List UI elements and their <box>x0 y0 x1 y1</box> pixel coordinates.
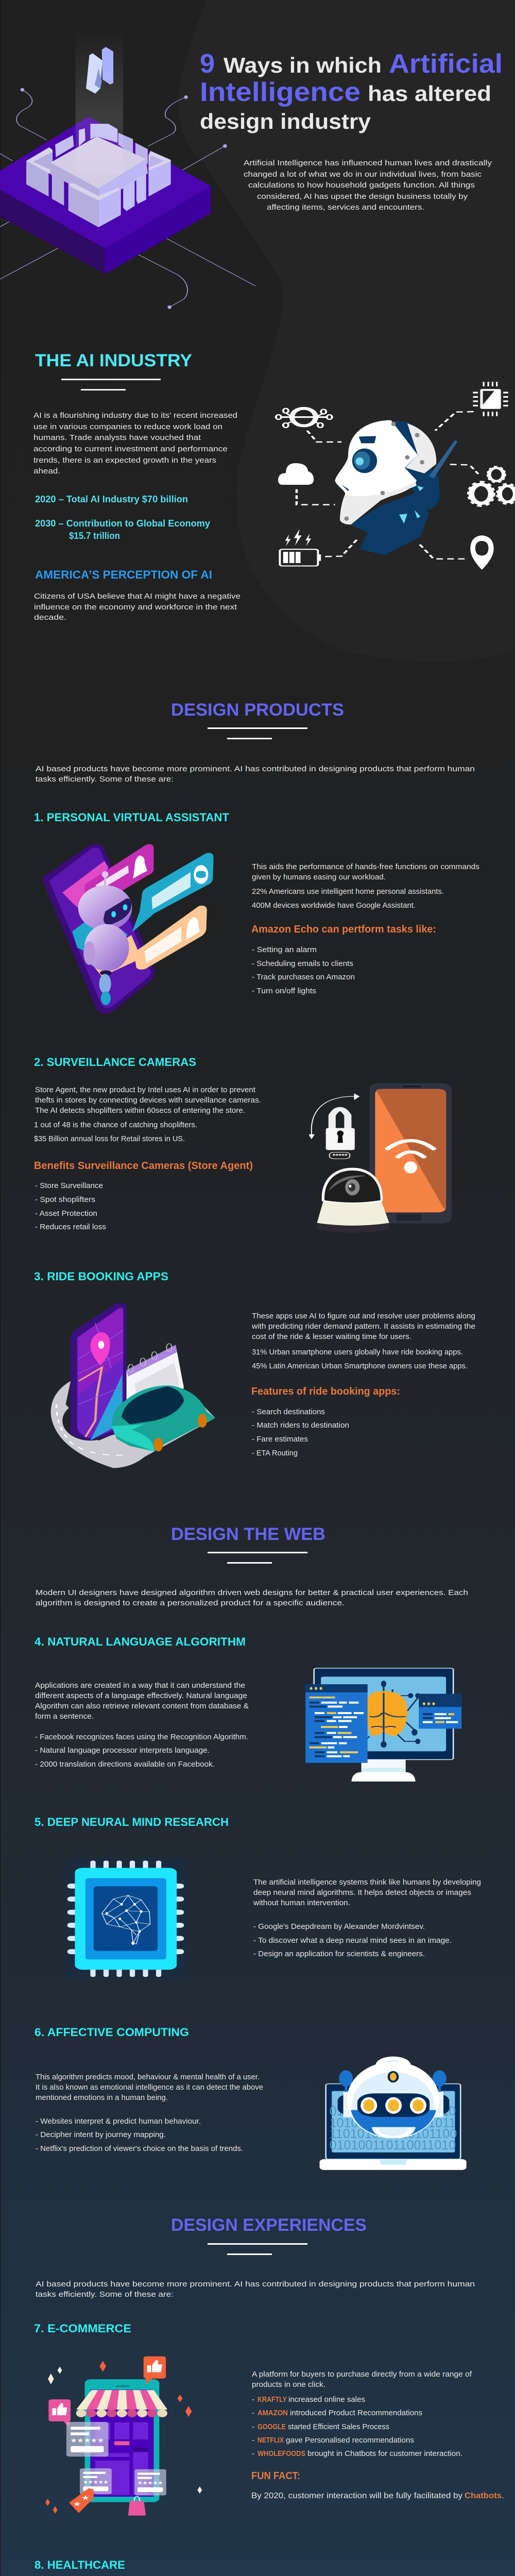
benefits list <box>35 1181 106 1231</box>
deep neural text: without human intervention. <box>253 1899 350 1907</box>
e-commerce brand list: WHOLEFOODS <box>258 2449 305 2458</box>
fun fact: e-commerce: Chatbots <box>465 2492 502 2500</box>
market statistics: $15.7 trillion <box>69 531 120 541</box>
fun fact: e-commerce: FUN FACT: <box>251 2470 300 2482</box>
America's perception paragraph <box>34 592 241 622</box>
illustration: robot in laptop <box>320 2057 467 2170</box>
benefits list: - Asset Protection <box>35 1209 97 1218</box>
icon: gears <box>469 467 515 506</box>
deep neural text: - Google's Deepdream by Alexander Mordvintsev. <box>253 1922 425 1931</box>
e-commerce brand list: - <box>252 2422 254 2431</box>
e-commerce brand list: GOOGLE <box>258 2422 286 2431</box>
natural language text: different aspects of a language effectively. Natural language <box>35 1691 247 1700</box>
illustration: monitor with brain and code panels <box>305 1668 461 1782</box>
design experiences intro: tasks efficiently. Some of these are: <box>36 2290 174 2299</box>
affective computing text: - Websites interpret & predict human behaviour. <box>36 2117 201 2126</box>
heading: design experiences <box>171 2215 367 2255</box>
heading: the AI industry: THE AI INDUSTRY <box>35 351 192 370</box>
price tag <box>69 2488 94 2513</box>
title: has altered <box>368 81 491 106</box>
like bubble: pink <box>48 2399 71 2427</box>
brain <box>362 1681 420 1748</box>
amazon echo task list: - Turn on/off lights <box>252 987 316 995</box>
surveillance text <box>34 1086 261 1143</box>
amazon echo task list: - Setting an alarm <box>252 945 317 954</box>
market statistics <box>35 494 210 541</box>
robot character <box>78 871 132 1005</box>
awning <box>76 2390 167 2417</box>
natural language text: - Natural language processor interprets language. <box>35 1746 210 1755</box>
review card: ★★★★★ <box>70 2436 104 2444</box>
intro paragraph: affecting items, services and encounters. <box>267 203 424 212</box>
amazon echo subheading: Amazon Echo can pertform tasks like: <box>251 924 436 935</box>
review card small left: ★★★★★ <box>83 2480 108 2485</box>
personal assistant text: given by humans easing our workload. <box>252 873 386 882</box>
binary digits <box>330 2104 457 2152</box>
e-commerce brand list: AMAZON <box>258 2409 288 2417</box>
heading: natural language algorithm: 4. NATURAL LANGUAGE ALGORITHM <box>35 1635 246 1648</box>
illustration: robot head with icons <box>276 382 515 570</box>
e-commerce brand list: gave Personalised recommendations <box>286 2436 414 2445</box>
e-commerce brand list: - <box>252 2409 254 2417</box>
market statistics: 2020 – Total AI Industry $70 billion <box>35 494 188 504</box>
robot head <box>335 420 457 555</box>
surveillance text: thefts in stores by connecting devices with surveillance cameras. <box>35 1096 261 1105</box>
title <box>200 49 503 133</box>
ride booking text: 45% Latin American Urban Smartphone owners use these apps. <box>252 1362 468 1370</box>
AI industry paragraph: humans. Trade analysts have vouched that <box>33 433 201 442</box>
price tag: ★ <box>73 2500 81 2507</box>
deep neural text <box>253 1878 481 1958</box>
intro paragraph <box>244 159 492 212</box>
affective computing text: This algorithm predicts mood, behaviour & mental health of a user. <box>36 2073 260 2081</box>
heading: America's perception: AMERICA’S PERCEPTION OF AI <box>35 568 212 581</box>
illustration: neural brain microchip <box>65 1857 187 1980</box>
market statistics: 2030 – Contribution to Global Economy <box>35 518 210 529</box>
surveillance text: $35 Billion annual loss for Retail stores in US. <box>34 1134 185 1143</box>
icon: circuit <box>276 409 332 428</box>
fun fact: e-commerce <box>251 2470 504 2500</box>
benefits list: - Spot shoplifters <box>35 1195 95 1204</box>
design products intro <box>36 765 475 784</box>
America's perception paragraph: decade. <box>34 613 66 622</box>
teal car <box>112 1385 215 1451</box>
personal assistant text: This aids the performance of hands-free functions on commands <box>252 862 479 871</box>
design the web intro: Modern UI designers have designed algorithm driven web designs for better & practical user experiences. Each <box>36 1588 468 1597</box>
fun fact: e-commerce: By 2020, customer interaction will be fully facilitated by <box>251 2492 462 2500</box>
ride booking text: 31% Urban smartphone users globally have ride booking apps. <box>252 1348 463 1357</box>
heading: the AI industry <box>35 351 192 391</box>
ride booking feature list: - ETA Routing <box>252 1449 298 1458</box>
design products intro: tasks efficiently. Some of these are: <box>36 775 174 784</box>
AI industry paragraph: use in various companies to reduce work load on <box>33 422 222 431</box>
icon: microchip <box>473 382 508 416</box>
phone shop <box>85 2379 159 2502</box>
ride booking feature list: - Fare estimates <box>252 1435 308 1444</box>
personal assistant text: 400M devices worldwide have Google Assistant. <box>252 901 416 910</box>
heading: design the web <box>171 1524 325 1564</box>
heading: ride booking apps: 3. RIDE BOOKING APPS <box>34 1270 168 1283</box>
AI industry paragraph <box>33 411 237 476</box>
design products intro: AI based products have become more prominent. AI has contributed in designing products that perform human <box>36 765 475 773</box>
heading: design the web: DESIGN THE WEB <box>171 1524 325 1544</box>
icon: AI letters <box>86 47 113 94</box>
e-commerce text: A platform for buyers to purchase directly from a wide range of <box>252 2370 472 2379</box>
price tag: ★ <box>81 2494 90 2501</box>
ride booking text: cost of the ride & lesser waiting time for users. <box>252 1332 411 1341</box>
e-commerce brand list: - <box>252 2436 254 2445</box>
benefits list: - Reduces retail loss <box>35 1223 106 1231</box>
e-commerce brand list: introduced Product Recommendations <box>290 2409 422 2417</box>
intro paragraph: considered, AI has upset the design business totally by <box>257 192 468 201</box>
America's perception paragraph: influence on the economy and workforce in the next <box>34 603 237 612</box>
amazon echo task list: - Scheduling emails to clients <box>252 959 353 968</box>
surveillance text: The AI detects shoplifters within 60secs of entering the store. <box>35 1106 245 1115</box>
review card small left <box>80 2468 112 2494</box>
neural brain <box>102 1895 150 1944</box>
personal assistant text: 22% Americans use intelligent home personal assistants. <box>252 887 444 896</box>
lock with password <box>309 1093 359 1159</box>
e-commerce brand list: NETFLIX <box>258 2436 284 2445</box>
calendar <box>127 1344 184 1412</box>
phone <box>370 1083 452 1224</box>
illustration: ride booking phone, calendar and car <box>51 1303 215 1468</box>
affective computing text: mentioned emotions in a human being. <box>36 2093 168 2102</box>
heading: deep neural mind research: 5. DEEP NEURAL MIND RESEARCH <box>35 1816 229 1828</box>
ride booking text <box>251 1312 475 1370</box>
natural language text: Algorithm can also retrieve relevant content from database & <box>35 1702 249 1710</box>
AI industry paragraph: trends, there is an expected growth in the years <box>33 456 216 465</box>
amazon echo task list: - Track purchases on Amazon <box>252 973 355 981</box>
e-commerce text: products in one click. <box>252 2380 325 2389</box>
ride booking feature list: - Match riders to destination <box>252 1421 349 1430</box>
icon: location pin <box>470 535 494 570</box>
natural language text: Applications are created in a way that it can understand the <box>35 1681 245 1690</box>
e-commerce brand list: - <box>252 2449 254 2458</box>
e-commerce brand list: KRAFTLY <box>258 2395 287 2404</box>
benefits list: - Store Surveillance <box>35 1181 103 1190</box>
map phone <box>71 1303 126 1440</box>
review card small right: ★★★★★ <box>138 2480 163 2486</box>
robot <box>338 2057 450 2139</box>
personal assistant text <box>252 862 479 910</box>
deep neural text: The artificial intelligence systems think like humans by developing <box>253 1878 481 1887</box>
heading: healthcare: 8. HEALTHCARE <box>35 2558 125 2571</box>
title: design industry <box>200 109 371 133</box>
like bubble: orange <box>144 2357 166 2384</box>
title: Artificial <box>389 49 503 79</box>
design experiences intro: AI based products have become more prominent. AI has contributed in designing products that perform human <box>36 2280 475 2289</box>
e-commerce brand list: brought in Chatbots for customer interaction. <box>307 2449 462 2458</box>
amazon echo task list <box>252 945 355 995</box>
benefits subheading: Benefits Surveillance Cameras (Store Agent) <box>34 1160 253 1172</box>
icon: cloud <box>278 463 314 485</box>
icon: battery <box>280 529 321 566</box>
e-commerce brand list: - <box>252 2395 254 2404</box>
intro paragraph: calculations to how household gadgets function. All things <box>248 181 475 190</box>
affective computing text <box>36 2073 263 2153</box>
AI industry paragraph: according to current investment and performance <box>33 445 228 453</box>
chat bubble: peach <box>134 906 207 970</box>
design the web intro <box>36 1588 468 1607</box>
natural language text: form a sentence. <box>35 1712 94 1721</box>
heading: e-commerce: 7. E-COMMERCE <box>34 2322 131 2335</box>
heading: design products <box>171 700 344 739</box>
review card <box>66 2422 108 2456</box>
fun fact: e-commerce: . <box>502 2492 504 2500</box>
natural language text <box>35 1681 249 1769</box>
title: 9 <box>200 49 215 79</box>
e-commerce text <box>252 2370 472 2389</box>
surveillance text: 1 out of 48 is the chance of catching shoplifters. <box>34 1121 197 1129</box>
camera <box>317 1168 389 1233</box>
illustration: isometric AI chip platform <box>0 31 255 309</box>
title: Ways in which <box>224 53 382 77</box>
AI industry paragraph: AI is a flourishing industry due to its' recent increased <box>33 411 237 420</box>
right code panel <box>419 1694 461 1728</box>
lock with password: ***** <box>332 1153 348 1159</box>
ride booking text: These apps use AI to figure out and resolve user problems along <box>252 1312 475 1320</box>
intro paragraph: Artificial Intelligence has influenced human lives and drastically <box>244 159 492 167</box>
heading: surveillance cameras: 2. SURVEILLANCE CAMERAS <box>34 1056 196 1069</box>
title: Intelligence <box>200 77 360 107</box>
chat bubble: magenta <box>85 844 153 899</box>
affective computing text: It is also known as emotional intelligence as it can detect the above <box>36 2083 263 2092</box>
AI industry paragraph: ahead. <box>33 467 60 476</box>
ride booking subheading: Features of ride booking apps: <box>251 1386 400 1397</box>
e-commerce brand list <box>252 2395 462 2458</box>
ride booking feature list <box>252 1408 349 1458</box>
affective computing text: - Decipher intent by journey mapping. <box>36 2130 166 2139</box>
ride booking text: with predicting rider demand pattern. It assists in estimating the <box>251 1322 475 1331</box>
affective computing text: - Netflix's prediction of viewer's choice on the basis of trends. <box>36 2144 243 2153</box>
left code panel <box>305 1684 368 1763</box>
surveillance text: Store Agent, the new product by Intel uses AI in order to prevent <box>35 1086 256 1094</box>
heading: design products: DESIGN PRODUCTS <box>171 700 344 720</box>
review card small right <box>134 2469 166 2496</box>
heading: affective computing: 6. AFFECTIVE COMPUTING <box>35 2026 189 2039</box>
illustration: smart phone, lock and camera <box>309 1083 452 1233</box>
illustration: phone with robot assistant <box>42 844 214 1014</box>
ride booking feature list: - Search destinations <box>252 1408 325 1416</box>
road <box>51 1381 215 1468</box>
natural language text: - Facebook recognizes faces using the Recognition Algorithm. <box>35 1733 248 1741</box>
heading: design experiences: DESIGN EXPERIENCES <box>171 2215 367 2235</box>
e-commerce brand list: increased online sales <box>288 2395 365 2404</box>
illustration: phone storefront <box>45 2357 202 2516</box>
shopping bag <box>128 2496 146 2516</box>
design the web intro: algorithm is designed to create a personalized product for a specific audience. <box>36 1599 345 1607</box>
intro paragraph: changed a lot of what we do in our individual lives, from basic <box>244 170 482 179</box>
sparkles <box>45 2361 202 2514</box>
design experiences intro <box>36 2280 475 2299</box>
deep neural text: deep neural mind algorithms. It helps detect objects or images <box>253 1888 471 1897</box>
deep neural text: - To discover what a deep neural mind sees in an image. <box>253 1936 452 1945</box>
e-commerce brand list: started Efficient Sales Process <box>288 2422 389 2431</box>
America's perception paragraph: Citizens of USA believe that AI might have a negative <box>34 592 241 601</box>
natural language text: - 2000 translation directions available on Facebook. <box>35 1760 215 1769</box>
deep neural text: - Design an application for scientists & engineers. <box>253 1950 425 1958</box>
chat bubble: cyan <box>132 853 214 933</box>
heading: personal virtual assistant: 1. PERSONAL VIRTUAL ASSISTANT <box>34 811 230 824</box>
